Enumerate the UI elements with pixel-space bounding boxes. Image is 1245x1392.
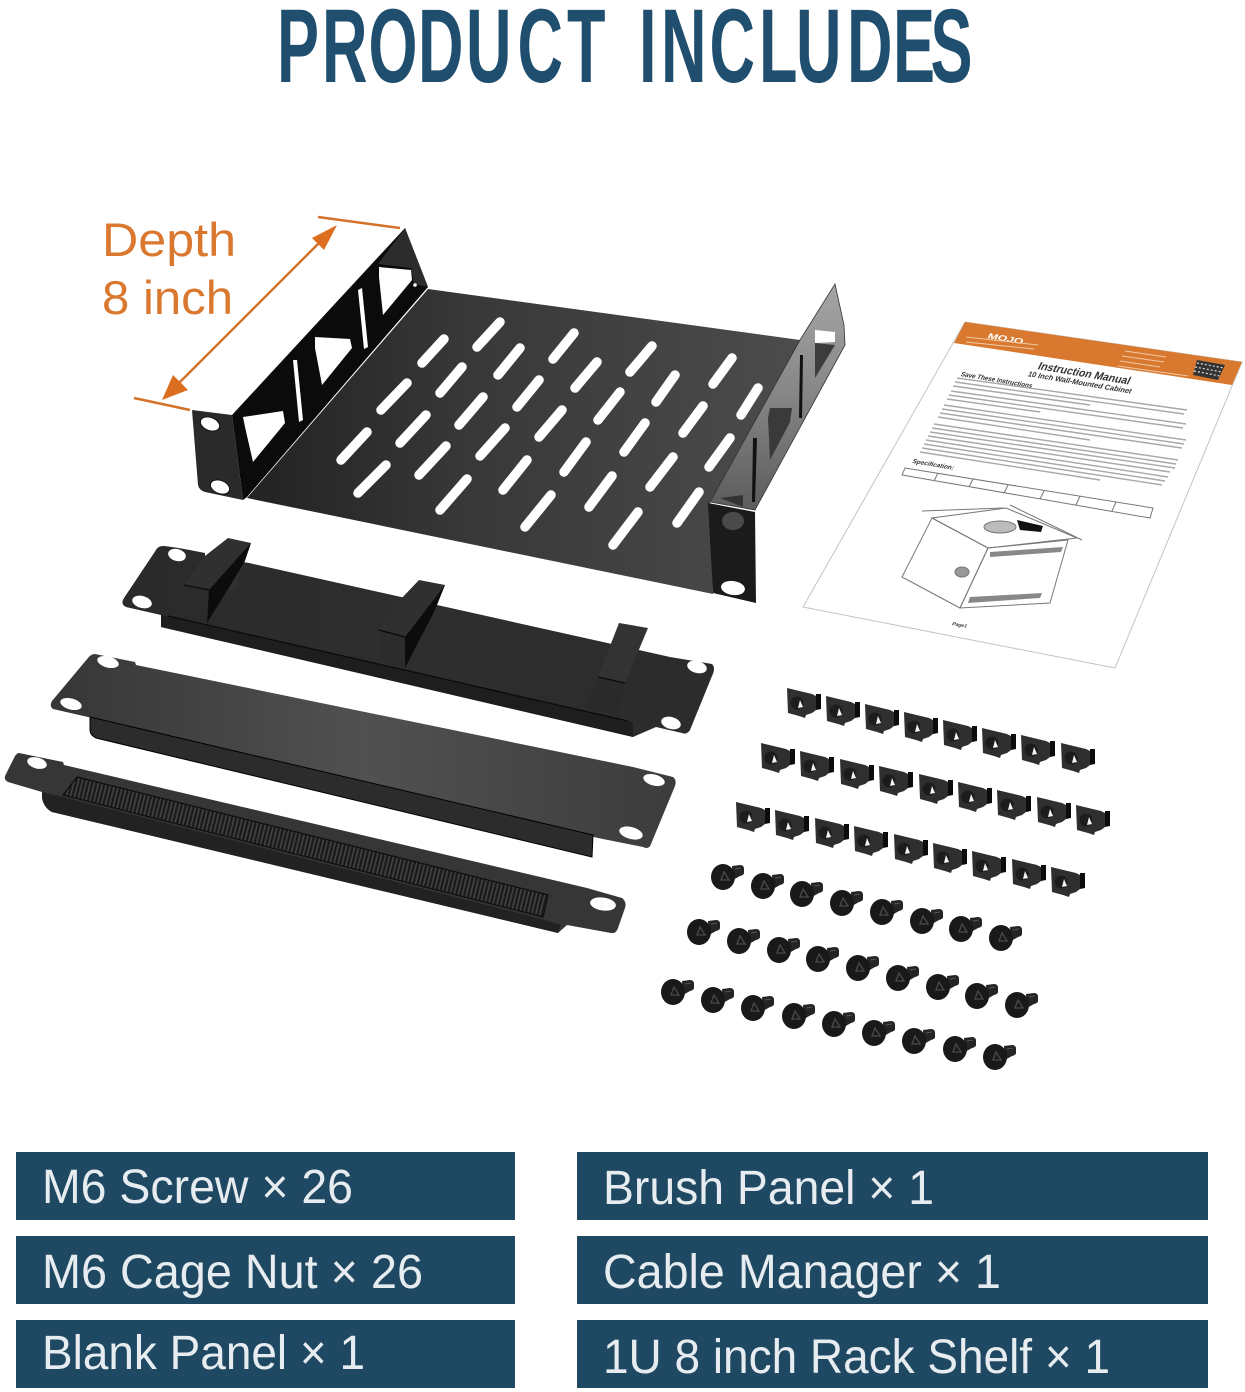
depth arrow [134, 217, 400, 410]
manual text: MOJO [986, 332, 1025, 346]
parts list: M6 Screw: M6 Screw × 26 [42, 1161, 353, 1214]
shelf left wall [232, 228, 428, 500]
manual body lines [920, 378, 1187, 485]
parts list: Brush Panel [577, 1152, 1208, 1220]
right ear details [720, 512, 746, 597]
parts list: Blank Panel [16, 1320, 515, 1388]
manual header band [954, 322, 1242, 385]
depth dimension annotation [102, 213, 400, 410]
brush panel lip [42, 792, 561, 933]
right wall openings [720, 330, 835, 507]
parts list: Rack Shelf: 1U 8 inch Rack Shelf × 1 [603, 1331, 1110, 1384]
parts list: Brush Panel: Brush Panel × 1 [603, 1162, 934, 1215]
blank panel holes [59, 654, 666, 842]
instruction manual [803, 322, 1242, 668]
specification table [902, 468, 1153, 518]
blank panel [51, 654, 676, 857]
depth label: 8 inch [102, 271, 233, 324]
manual text: Page1 [951, 622, 968, 629]
brush panel [5, 753, 626, 933]
cable manager plate [122, 546, 714, 737]
parts list: Blank Panel: Blank Panel × 1 [42, 1327, 365, 1380]
cage nuts [736, 688, 1110, 897]
cable manager [122, 538, 714, 737]
brush slot [63, 777, 548, 917]
shelf floor [247, 289, 800, 594]
depth label [102, 213, 236, 324]
manual text: Save These Instructions [959, 370, 1034, 390]
left ear holes [198, 414, 232, 497]
parts list: M6 Cage Nut [16, 1236, 515, 1304]
cable manager holes [131, 547, 708, 731]
manual sheet [803, 322, 1242, 668]
parts list: Rack Shelf [577, 1320, 1208, 1388]
shelf right ear [708, 503, 756, 603]
brush panel plate [5, 753, 626, 933]
parts list: M6 Cage Nut: M6 Cage Nut × 26 [42, 1246, 423, 1299]
manual text [841, 329, 1148, 637]
manual text: 10 Inch Wall-Mounted Cabinet [1026, 370, 1134, 395]
parts list: Cable Manager [577, 1236, 1208, 1304]
rack shelf [192, 228, 845, 603]
depth label: Depth [102, 213, 236, 266]
cabinet line drawing [902, 505, 1082, 608]
left wall openings [243, 267, 417, 462]
shelf right wall [710, 284, 845, 510]
blank panel lip [90, 717, 593, 857]
manual text: Specification: [911, 457, 956, 471]
screws [661, 864, 1038, 1070]
brush panel holes [26, 755, 617, 912]
parts list: M6 Screw [16, 1152, 515, 1220]
blank panel plate [51, 654, 676, 848]
manual header small text [966, 337, 1188, 376]
manual text: Instruction Manual [1036, 359, 1133, 387]
parts list: Cable Manager: Cable Manager × 1 [603, 1246, 1001, 1299]
shelf left ear [192, 410, 243, 500]
QR code [1193, 360, 1225, 380]
shelf ventilation slots [341, 322, 758, 545]
cable clips [184, 538, 648, 717]
cable manager lip [161, 615, 633, 737]
